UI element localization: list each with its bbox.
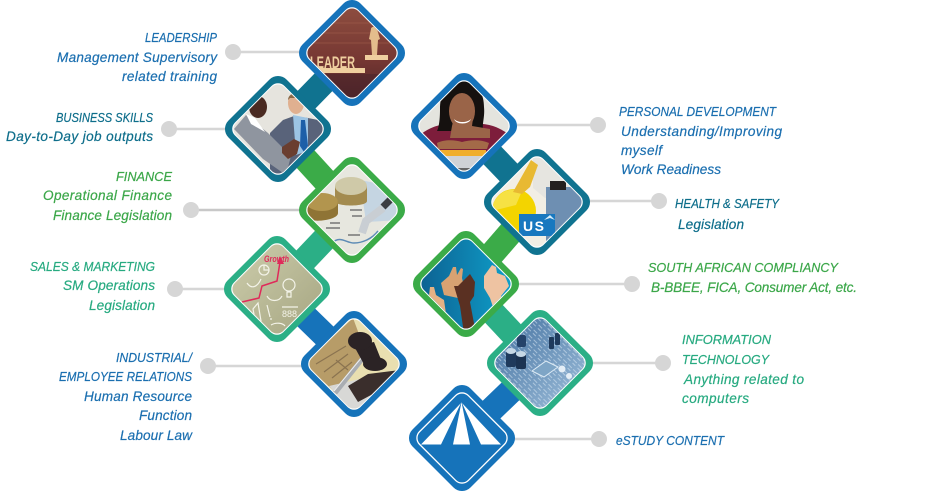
label: finance: Operational Finance: [43, 188, 172, 203]
label: leadership: [57, 30, 218, 84]
label: health and safety: Legislation: [678, 217, 744, 232]
label: health and safety: HEALTH & SAFETY: [675, 196, 780, 211]
label: personal development: Understanding/Improving: [621, 124, 782, 139]
label: south african compliancy: [648, 260, 857, 295]
leader lines and dots: [161, 44, 671, 447]
label: business skills: Day-to-Day job outputs: [6, 129, 153, 144]
label: information technology: INFORMATION: [682, 332, 772, 347]
icon: leadership diamond: [299, 0, 405, 106]
label: personal development: Work Readiness: [621, 162, 721, 177]
label: industrial employee relations: Labour Law: [120, 428, 193, 443]
label: sales and marketing: [30, 259, 155, 313]
label: personal development: PERSONAL DEVELOPMENT: [619, 104, 777, 119]
label: sales and marketing: Legislation: [89, 298, 155, 313]
label: information technology: Anything related to: [683, 372, 804, 387]
label: personal development: myself: [621, 143, 663, 158]
label: industrial employee relations: [59, 350, 193, 443]
icon: health and safety diamond: [484, 149, 590, 255]
label: industrial employee relations: EMPLOYEE RELATIONS: [59, 369, 192, 384]
label: industrial employee relations: Human Resource: [84, 389, 192, 404]
label: business skills: BUSINESS SKILLS: [56, 110, 153, 125]
icon: sales and marketing diamond: 888: [282, 309, 297, 319]
icon: information technology diamond: [487, 310, 593, 416]
icon: south african compliancy diamond: [413, 231, 519, 337]
label: business skills: [6, 110, 153, 144]
label: sales and marketing: SALES & MARKETING: [30, 259, 155, 274]
icon: eStudy road logo diamond: [404, 380, 520, 491]
icon: leadership diamond: LEADER: [310, 53, 355, 72]
label: finance: FINANCE: [116, 169, 172, 184]
icon: personal development diamond: [411, 73, 517, 179]
label: sales and marketing: SM Operations: [63, 278, 155, 293]
label: finance: Finance Legislation: [53, 208, 172, 223]
label: south african compliancy: SOUTH AFRICAN COMPLIANCY: [648, 260, 839, 275]
label: information technology: TECHNOLOGY: [682, 352, 770, 367]
label: information technology: [682, 332, 804, 406]
connectors between left diamonds: [277, 53, 354, 364]
icon: sales and marketing diamond: [224, 236, 330, 342]
label: information technology: computers: [682, 391, 749, 406]
icon: industrial relations diamond: [301, 311, 407, 417]
label: industrial employee relations: Function: [139, 408, 192, 423]
label: leadership: Management Supervisory: [57, 50, 218, 65]
label: south african compliancy: B-BBEE, FICA, Consumer Act, etc.: [651, 280, 857, 295]
label: leadership: related training: [122, 69, 217, 84]
label: finance: [43, 169, 172, 223]
icon: sales and marketing diamond: Growth: [264, 254, 289, 265]
connectors between right diamonds: [462, 126, 540, 438]
label: personal development: [619, 104, 782, 177]
label: health and safety: [675, 196, 780, 232]
icon: health and safety diamond: U S: [523, 218, 544, 234]
icon: finance diamond: [299, 157, 405, 263]
icon: business skills diamond: [225, 76, 331, 182]
label: industrial employee relations: INDUSTRIAL/: [116, 350, 193, 365]
label: leadership: LEADERSHIP: [145, 30, 217, 45]
label: eStudy content: eSTUDY CONTENT: [616, 433, 725, 448]
